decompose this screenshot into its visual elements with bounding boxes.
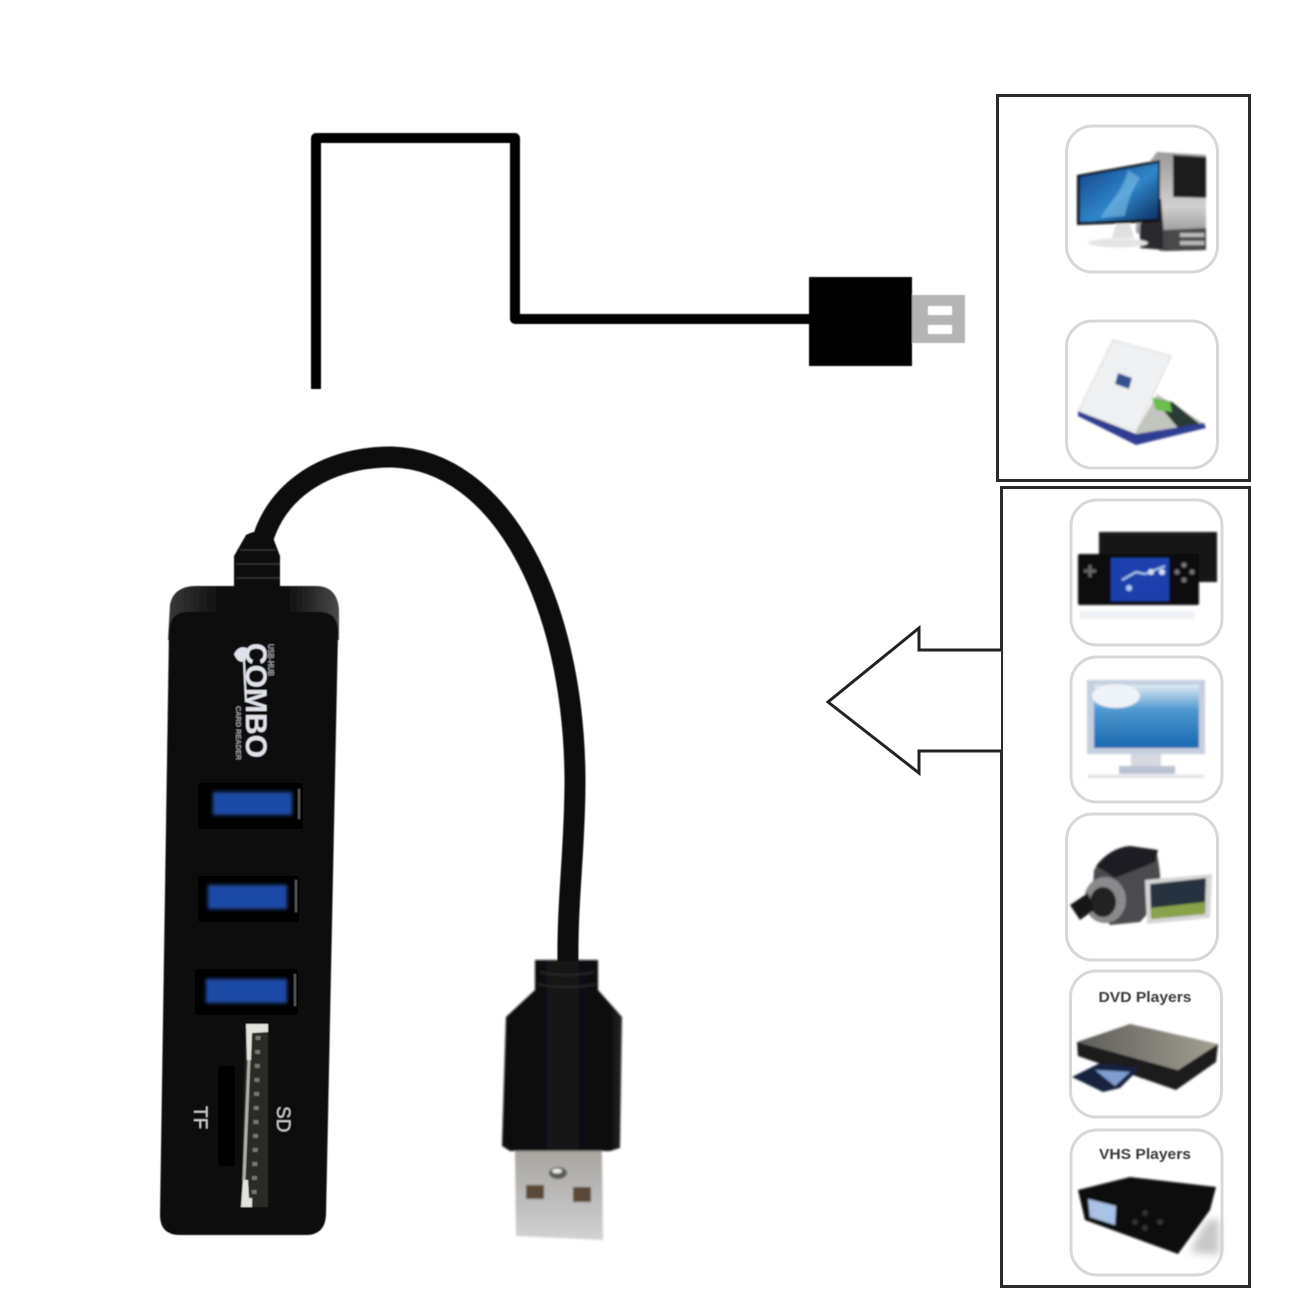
USB-A connector	[502, 960, 622, 1240]
USB port 1	[198, 783, 303, 829]
panel: computers	[998, 96, 1250, 480]
label: TF: TF	[189, 1106, 210, 1129]
panel: playback devices	[1002, 488, 1250, 1286]
icon: flat-screen TV	[1071, 657, 1222, 802]
USB port 2	[198, 876, 299, 922]
USB port 3	[195, 969, 298, 1015]
logo: USB-HUB COMBO card reader: USB-HUB	[266, 644, 275, 676]
icon: laptop	[1066, 321, 1218, 468]
icon: USB plug outline	[809, 277, 965, 366]
USB hub body	[160, 586, 339, 1235]
SD card slot	[241, 1024, 268, 1207]
TF card slot	[218, 1066, 235, 1166]
icon: desktop computer	[1066, 126, 1218, 272]
hub cable	[234, 457, 575, 965]
arrow: points to the hub	[828, 628, 1001, 773]
logo: USB-HUB COMBO card reader: CARD READER	[234, 706, 241, 760]
cable line drawing	[316, 138, 812, 389]
connector boot	[502, 960, 622, 1151]
icon: VHS player	[1071, 1130, 1222, 1275]
icon: DVD player	[1070, 971, 1222, 1117]
logo: USB-HUB COMBO card reader: COMBO	[239, 643, 272, 758]
icon: camcorder	[1066, 814, 1218, 960]
icon: handheld game console	[1071, 500, 1222, 645]
label: VHS Players: VHS Players	[1099, 1147, 1191, 1163]
label: SD: SD	[272, 1106, 293, 1132]
label: DVD Players: DVD Players	[1098, 990, 1192, 1006]
